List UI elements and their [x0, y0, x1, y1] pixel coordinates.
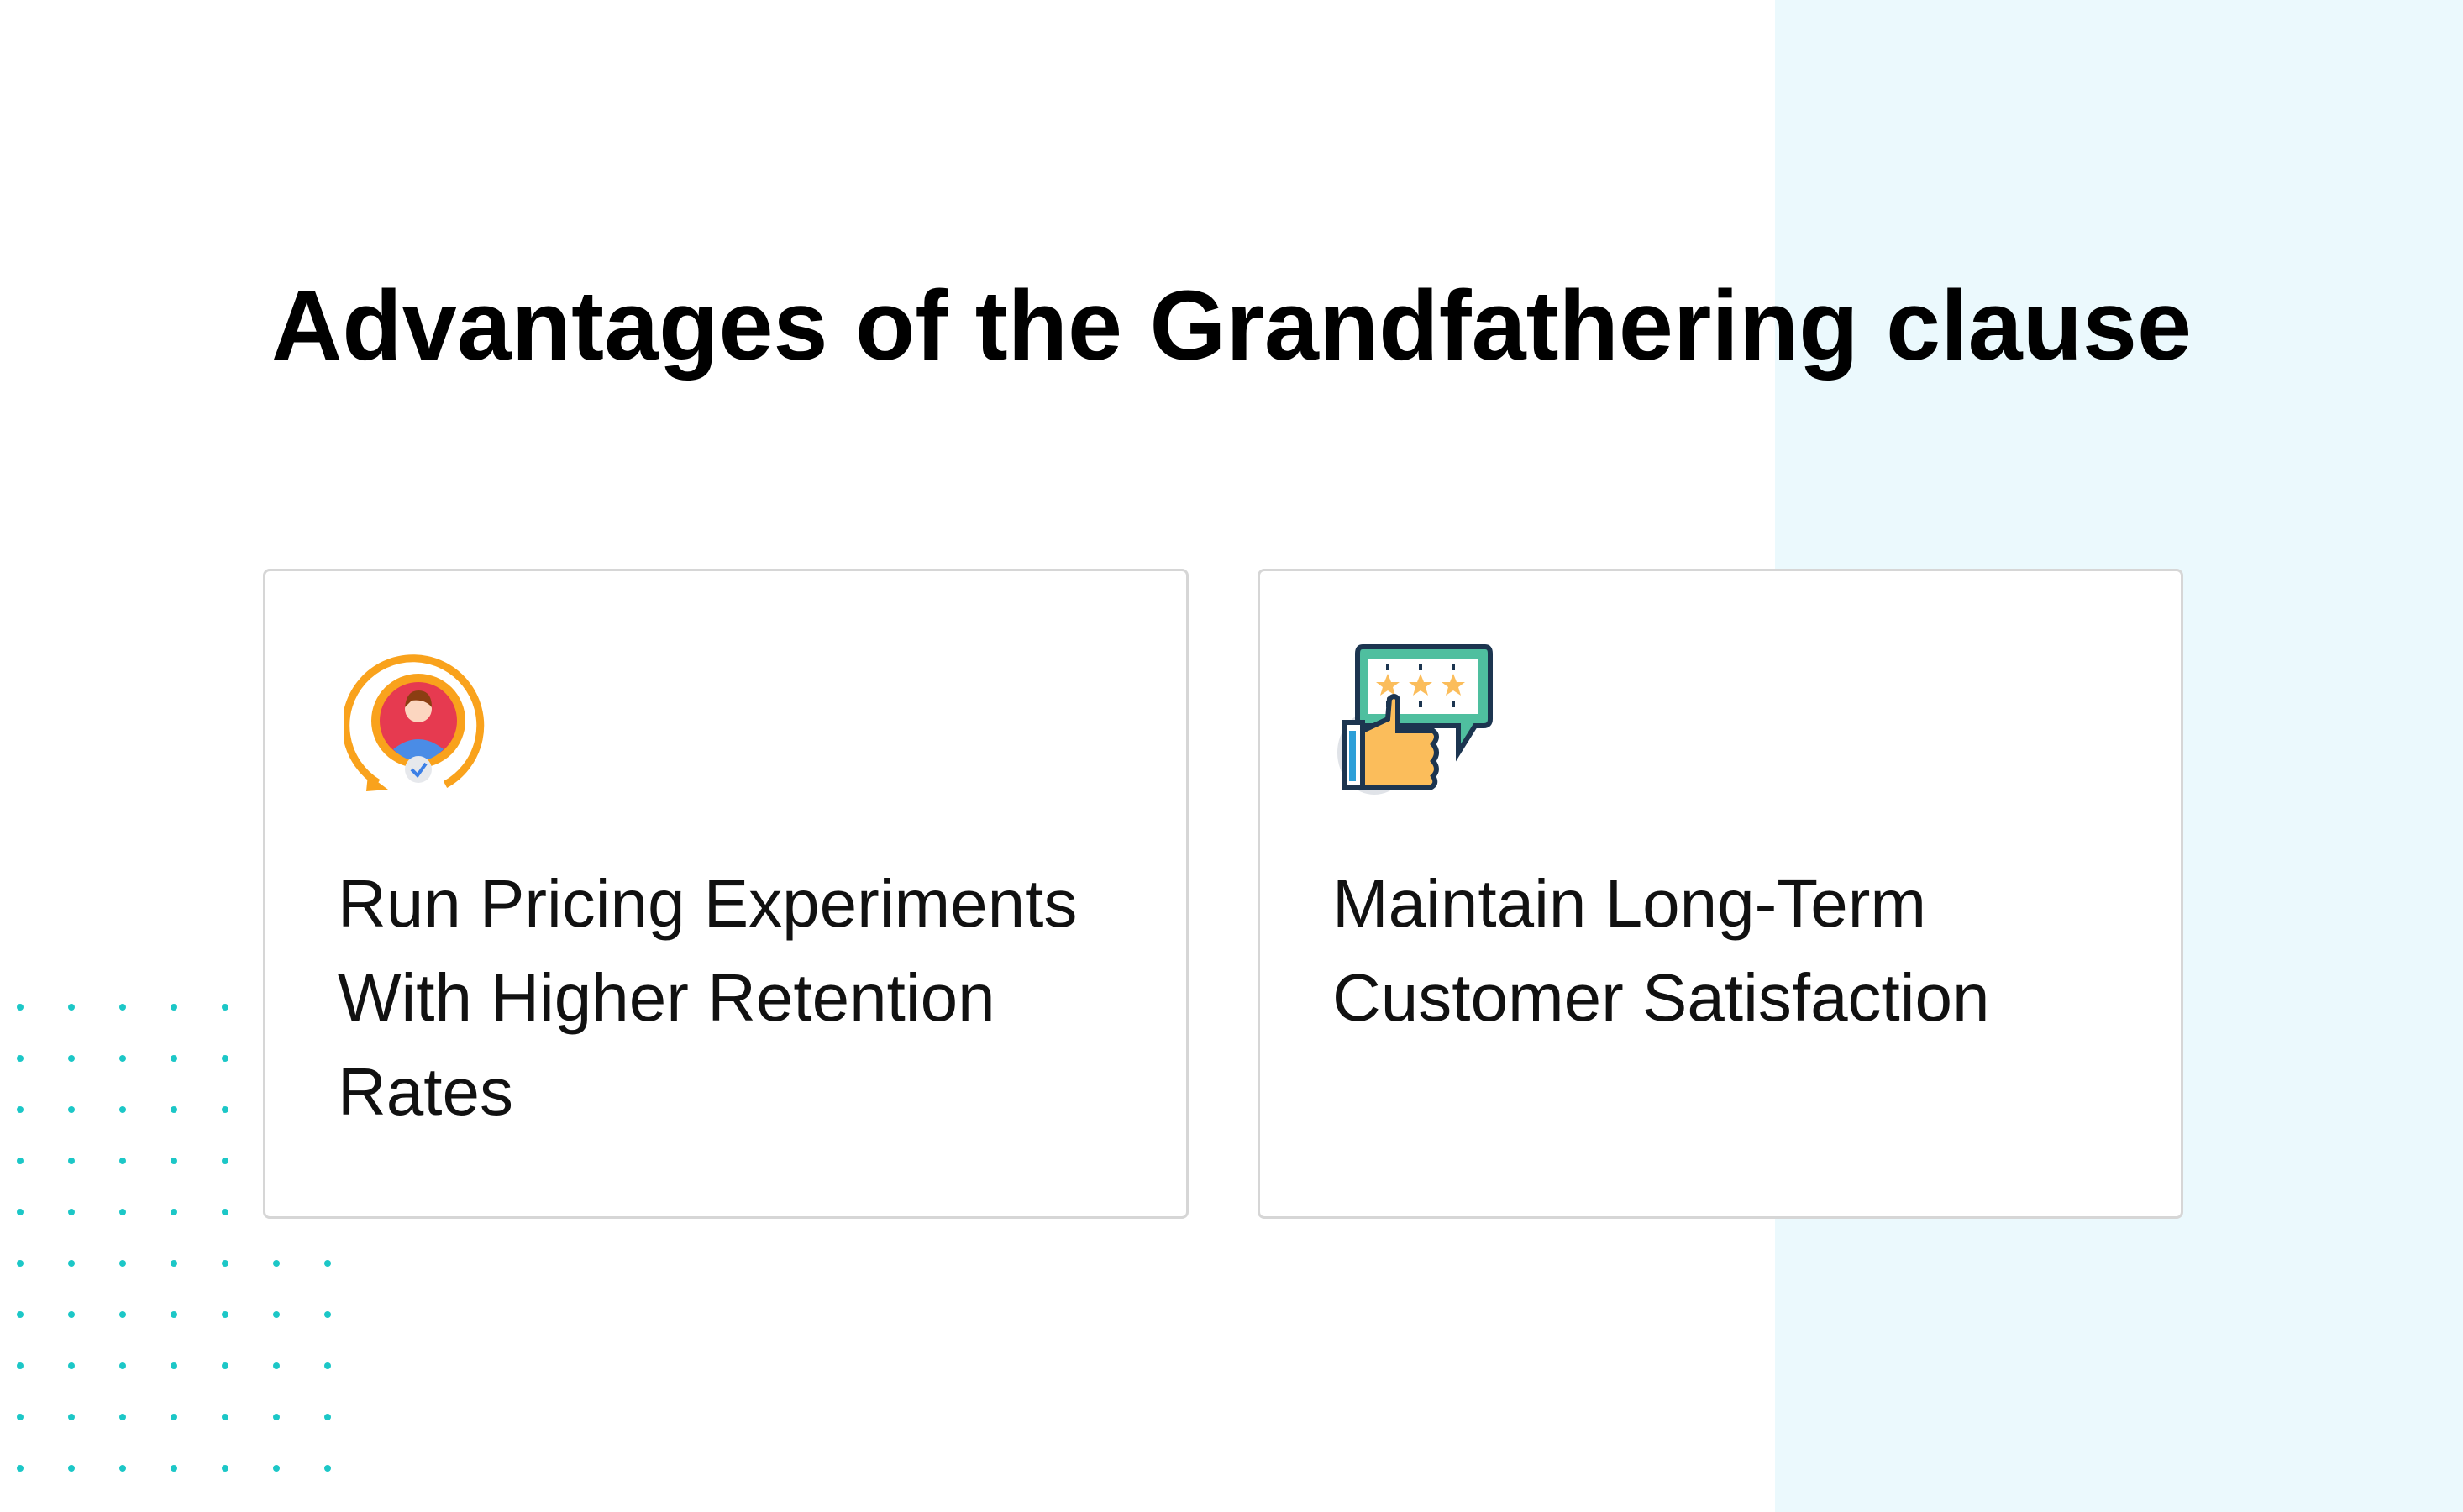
text: card 2: Customer Satisfaction — [1332, 960, 1990, 1035]
panel: card 2 — [1258, 569, 2183, 1219]
text: card 2 — [1332, 866, 1990, 1035]
text: card 1: Run Pricing Experiments — [338, 866, 1077, 941]
icon: customer retention — [344, 654, 484, 791]
text: card 2: Maintain Long-Term — [1332, 866, 1926, 941]
panel: card 1 — [263, 569, 1189, 1219]
text: card 1: Rates — [338, 1054, 513, 1129]
text: card 1 — [338, 866, 1077, 1129]
icon: thumbs up rating — [1337, 644, 1493, 795]
text: card 1: With Higher Retention — [338, 960, 995, 1035]
title: Advantages of the Grandfathering clause — [271, 270, 2192, 381]
dot pattern — [17, 1004, 331, 1472]
